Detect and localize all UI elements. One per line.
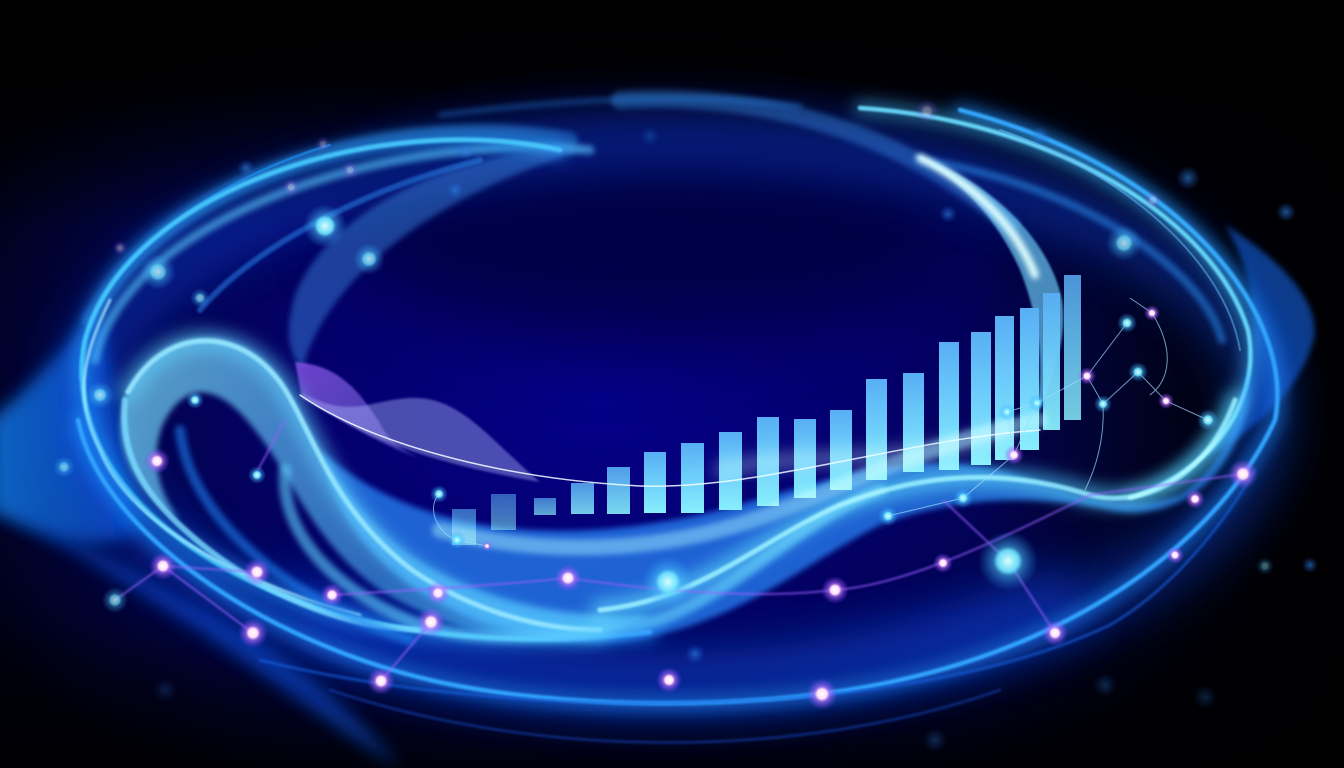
- faint background particles: [112, 99, 1318, 752]
- lower long ring: [78, 110, 1277, 703]
- upper hazy bands: [90, 132, 570, 320]
- violet wave: [295, 362, 540, 482]
- left swirl ribbons: [120, 337, 880, 640]
- upper right bright ribbon: [915, 155, 1063, 420]
- node network lines: [433, 298, 1208, 546]
- bar chart: [452, 275, 1081, 545]
- wave overlay across bars: [300, 395, 1235, 610]
- main left ring: [82, 140, 650, 639]
- outer glow wings: [0, 140, 1315, 768]
- violet connector lines: [115, 420, 1243, 681]
- central flowing wave: [320, 370, 1250, 643]
- orbit rings: [78, 99, 1277, 742]
- upper left ribbon: [289, 148, 590, 368]
- right inner ring: [860, 108, 1250, 498]
- glowing nodes: white-violet: [144, 305, 1258, 710]
- glowing nodes: cyan: [53, 204, 1274, 613]
